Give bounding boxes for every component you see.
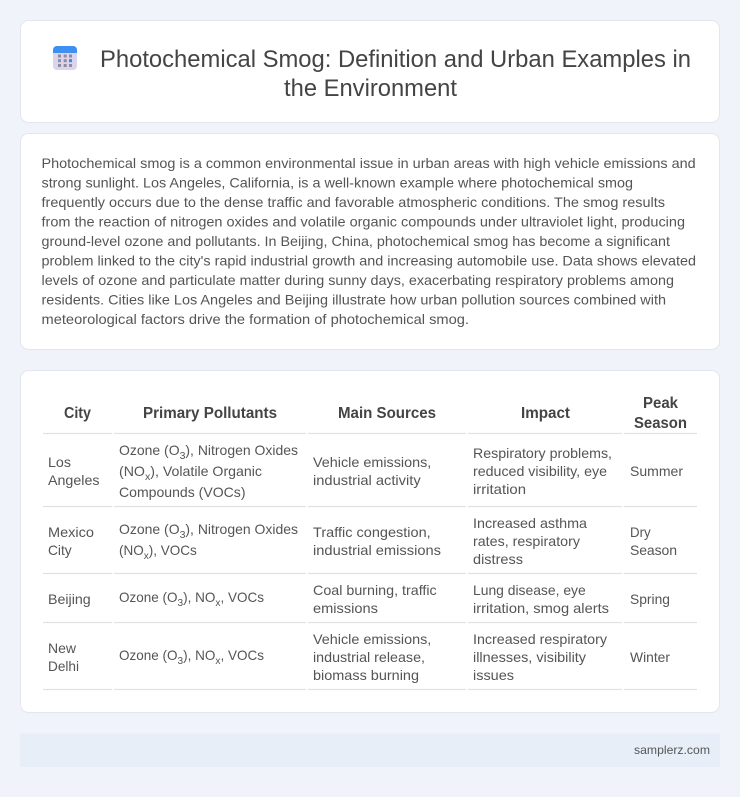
table row: New Delhi: x [215, 655, 221, 667]
table row: Mexico City: rates, respiratory [473, 533, 580, 549]
table row: New Delhi: ), NO [183, 647, 216, 663]
table row: New Delhi: illnesses, visibility [473, 649, 586, 665]
title: the Environment [284, 75, 457, 102]
table row: Los Angeles: 3 [180, 450, 186, 462]
table header row [43, 395, 697, 434]
table row: Mexico City: Increased asthma [473, 515, 587, 531]
table row: New Delhi: biomass burning [313, 667, 419, 683]
table row: New Delhi: New [48, 640, 77, 656]
table row: Mexico City: Mexico [48, 524, 94, 540]
text block: description paragraph: problem linked to the city's rapid industrial growth and increasing automobile use. Data shows elevated [42, 252, 696, 268]
table row: Beijing: Lung disease, eye [473, 582, 586, 598]
table header row: Season [634, 415, 687, 432]
table row: New Delhi: Delhi [48, 658, 79, 674]
table row: Beijing: , VOCs [220, 589, 264, 605]
table row: Beijing: irritation, smog alerts [473, 600, 609, 616]
panel: description [20, 134, 720, 350]
table row: Los Angeles: Compounds (VOCs) [119, 484, 246, 500]
table header row: Impact [521, 405, 571, 422]
table row: New Delhi: , VOCs [220, 647, 264, 663]
table row: Beijing: ), NO [183, 589, 216, 605]
table row: Los Angeles: Vehicle emissions, [313, 454, 431, 470]
table row: Mexico City: Dry [630, 524, 651, 540]
table row: Los Angeles: ), Volatile Organic [150, 463, 262, 479]
text block: description paragraph: frequently occurs due to the dense traffic and favorable atmospheric conditions. The smog results [42, 194, 665, 210]
footer source text: samplerz.com [634, 743, 710, 757]
table row: Mexico City: City [48, 542, 72, 558]
text block: description paragraph: from the reaction of nitrogen oxides and volatile organic compounds under ultraviolet light, producing [42, 214, 685, 230]
table row: Mexico City: distress [473, 551, 523, 567]
table row: Los Angeles: reduced visibility, eye [473, 463, 607, 479]
table row: New Delhi: industrial release, [313, 649, 425, 665]
table row: New Delhi: Winter [630, 649, 670, 665]
title: Photochemical Smog: Definition and Urban Examples in [100, 46, 691, 73]
table row: Mexico City: ), VOCs [149, 542, 197, 558]
table row: Mexico City: industrial emissions [313, 542, 441, 558]
table row: New Delhi: 3 [178, 655, 183, 667]
table row: Los Angeles: (NO [119, 463, 145, 479]
table row: Mexico City: 3 [180, 529, 186, 541]
table row: Los Angeles: Los [48, 454, 71, 470]
table row: Los Angeles: Respiratory problems, [473, 445, 612, 461]
table row: Los Angeles: x [145, 471, 151, 483]
table row: Mexico City: Traffic congestion, [313, 524, 431, 540]
table row: Mexico City: x [144, 550, 149, 562]
table header row: Primary Pollutants [143, 405, 277, 422]
table row: Beijing: x [215, 597, 221, 609]
table row: New Delhi: Ozone (O [119, 647, 180, 663]
table row: Los Angeles: irritation [473, 481, 526, 497]
table header row: City [64, 405, 91, 422]
table row: New Delhi: Vehicle emissions, [313, 631, 431, 647]
table header row: Peak [643, 395, 678, 412]
table row: Beijing: Spring [630, 591, 670, 607]
table row: Los Angeles: ), Nitrogen Oxides [185, 442, 298, 458]
table row: Beijing: Beijing [48, 591, 91, 607]
table row: Los Angeles: Angeles [48, 472, 100, 488]
table row: Beijing: emissions [313, 600, 378, 616]
table row: Mexico City: (NO [119, 542, 145, 558]
text block: description paragraph: ground-level ozone and pollutants. In Beijing, China, photochemical smog has become a significant [42, 233, 670, 249]
table row: Los Angeles: industrial activity [313, 472, 421, 488]
table row: Beijing: 3 [178, 597, 183, 609]
text block: description paragraph: Photochemical smog is a common environmental issue in urban areas with high vehicle emissions and [42, 155, 696, 171]
panel: title header [20, 20, 720, 122]
table row: Mexico City: Ozone (O [119, 521, 180, 537]
icon: calendar [53, 46, 77, 70]
table row: Mexico City: Season [630, 542, 677, 558]
table row: Los Angeles: Summer [630, 463, 683, 479]
text block: description paragraph: meteorological factors drive the formation of photochemical smog. [42, 311, 469, 327]
footer bar [20, 734, 720, 767]
table row: Los Angeles [43, 442, 697, 506]
table row: Mexico City [43, 515, 697, 574]
table row: Beijing: Coal burning, traffic [313, 582, 437, 598]
text block: description paragraph: strong sunlight. Los Angeles, California, is a well-known example where photochemical smog [42, 174, 633, 190]
panel: city comparison table [20, 370, 720, 712]
table header row: Main Sources [338, 405, 436, 422]
table row: New Delhi: issues [473, 667, 514, 683]
text block: description paragraph: residents. Cities like Los Angeles and Beijing illustrate how urban pollution sources combined with [42, 292, 666, 308]
table row: Beijing: Ozone (O [119, 589, 180, 605]
table row: Los Angeles: Ozone (O [119, 442, 180, 458]
title [100, 46, 691, 102]
table row: Beijing [43, 582, 697, 622]
text block: description paragraph [42, 155, 696, 327]
table row: New Delhi [43, 631, 697, 690]
table row: New Delhi: Increased respiratory [473, 631, 607, 647]
table row: Mexico City: ), Nitrogen Oxides [185, 521, 298, 537]
text block: description paragraph: levels of ozone and particulate matter during sunny days, exacerbating respiratory problems among [42, 272, 674, 288]
